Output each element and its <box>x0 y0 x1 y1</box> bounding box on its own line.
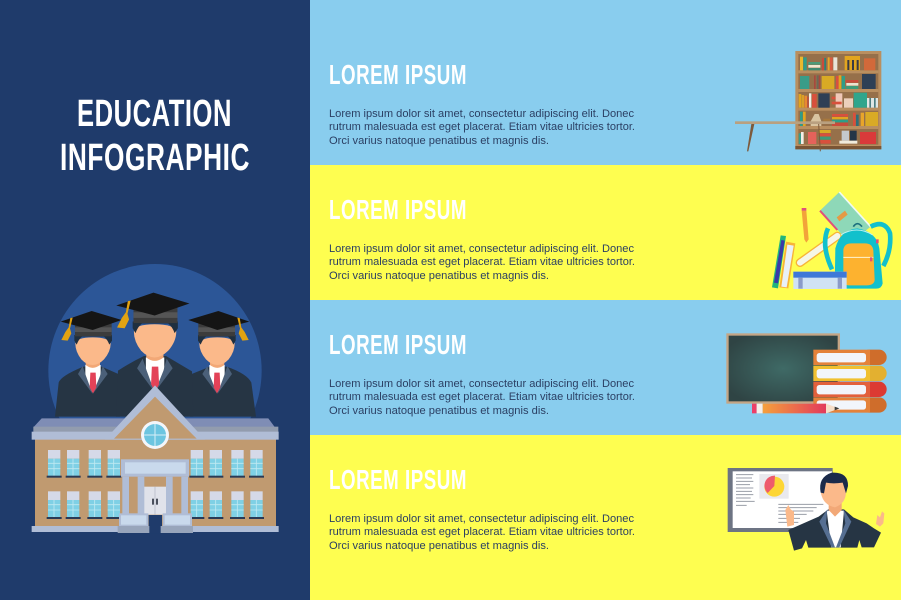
row 1 heading: LOREM IPSUM <box>329 59 467 90</box>
backpack straps <box>825 228 832 269</box>
row 3 text: Orci varius natoque penatibus et magnis dis. <box>329 405 549 417</box>
presentation screen <box>728 468 833 532</box>
school building <box>32 385 279 533</box>
title: EDUCATION <box>77 93 232 135</box>
panel: row 4 background <box>310 435 901 600</box>
green notebook <box>820 192 871 243</box>
backpack body <box>835 228 883 289</box>
row 3 text: rutrum malesuada est eget placerat. Etiam vitae ultricies tortor. <box>329 391 635 403</box>
row 4 heading: LOREM IPSUM <box>329 464 467 495</box>
row 1 text <box>329 108 635 147</box>
icon: presenter at screen <box>728 468 884 551</box>
row 2 text: Lorem ipsum dolor sit amet, consectetur adipiscing elit. Donec <box>329 243 635 255</box>
row 4 text: rutrum malesuada est eget placerat. Etiam vitae ultricies tortor. <box>329 526 635 538</box>
panel: row 1 background <box>310 0 901 165</box>
title: INFOGRAPHIC <box>60 137 250 179</box>
pencil <box>802 211 809 243</box>
row 2 heading: LOREM IPSUM <box>329 194 467 225</box>
row 2 text: Orci varius natoque penatibus et magnis dis. <box>329 270 549 282</box>
row 2 text: rutrum malesuada est eget placerat. Etiam vitae ultricies tortor. <box>329 256 635 268</box>
portico <box>121 459 189 477</box>
panel: row 3 background <box>310 300 901 435</box>
row 3 text: Lorem ipsum dolor sit amet, consectetur adipiscing elit. Donec <box>329 378 635 390</box>
icon: backpack and school supplies <box>772 192 890 289</box>
row 1 text: rutrum malesuada est eget placerat. Etiam vitae ultricies tortor. <box>329 121 635 133</box>
pencil <box>752 404 839 413</box>
ruler <box>800 236 837 263</box>
pie chart card <box>759 474 789 499</box>
books standing <box>772 235 786 288</box>
row 3 heading: LOREM IPSUM <box>329 329 467 360</box>
chalkboard <box>726 333 840 404</box>
graduates <box>55 293 256 417</box>
icon: bookshelf and desk <box>735 51 881 151</box>
row 1 text: Lorem ipsum dolor sit amet, consectetur adipiscing elit. Donec <box>329 108 635 120</box>
books <box>799 56 878 144</box>
desk <box>735 121 835 124</box>
icon: chalkboard, books and pencil <box>726 333 887 413</box>
panel: left navy sidebar <box>0 0 310 600</box>
backdrop circle <box>48 264 262 477</box>
illustration: graduates and school building <box>32 264 279 533</box>
presenter <box>785 473 884 551</box>
flat book <box>793 272 847 289</box>
row 4 text: Lorem ipsum dolor sit amet, consectetur adipiscing elit. Donec <box>329 513 635 525</box>
book stack <box>813 350 887 413</box>
row 4 text: Orci varius natoque penatibus et magnis dis. <box>329 540 549 552</box>
text lines <box>736 475 823 522</box>
row 4 text <box>329 513 635 552</box>
row 1 text: Orci varius natoque penatibus et magnis dis. <box>329 135 549 147</box>
title <box>60 93 250 179</box>
row 3 text <box>329 378 635 417</box>
windows <box>47 450 264 478</box>
row 2 text <box>329 243 635 282</box>
panel: row 2 background <box>310 165 901 300</box>
